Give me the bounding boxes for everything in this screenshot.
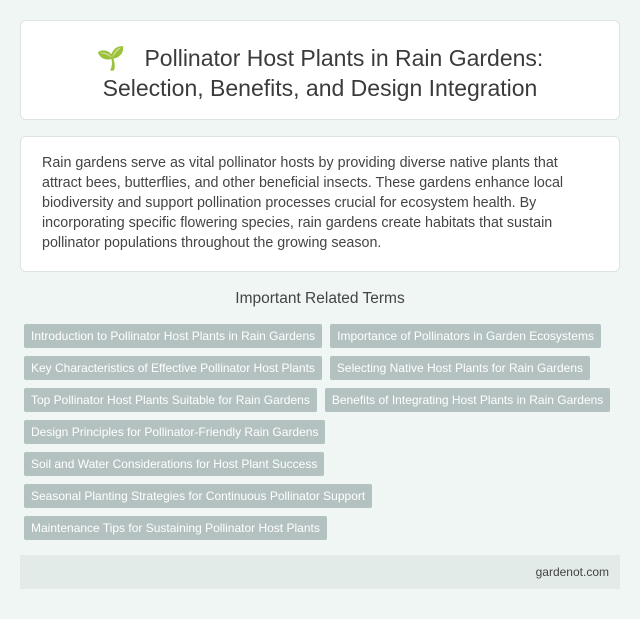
related terms tags: Design Principles for Pollinator-Friendly Rain Gardens	[31, 425, 318, 439]
related terms tags: Benefits of Integrating Host Plants in Rain Gardens	[332, 393, 603, 407]
related terms tags	[24, 324, 610, 540]
related terms tags: Introduction to Pollinator Host Plants in Rain Gardens	[31, 329, 315, 343]
related terms tags: Importance of Pollinators in Garden Ecosystems	[337, 329, 594, 343]
related terms tags: Maintenance Tips for Sustaining Pollinator Host Plants	[31, 521, 320, 535]
title: Selection, Benefits, and Design Integration	[103, 75, 537, 101]
related terms tags: Soil and Water Considerations for Host Plant Success	[31, 457, 317, 471]
title: 🌱 Pollinator Host Plants in Rain Gardens:	[97, 45, 543, 71]
description text: Rain gardens serve as vital pollinator hosts by providing diverse native plants that attract bees, butterflies, and other beneficial insects. These gardens enhance local biodiversity and support pollination processes crucial for ecosystem health. By incorporating specific flowering species, rain gardens create habitats that sustain pollinator populations throughout the growing season.	[42, 155, 563, 251]
footer: gardenot.com	[536, 565, 609, 579]
description card	[20, 136, 620, 272]
title	[97, 45, 543, 101]
related terms heading: Important Related Terms	[235, 290, 405, 307]
header card	[20, 20, 620, 120]
related terms tags: Key Characteristics of Effective Pollinator Host Plants	[31, 361, 315, 375]
footer	[20, 555, 620, 589]
related terms tags: Seasonal Planting Strategies for Continuous Pollinator Support	[31, 489, 365, 503]
related terms tags: Top Pollinator Host Plants Suitable for Rain Gardens	[31, 393, 310, 407]
related terms tags: Selecting Native Host Plants for Rain Gardens	[337, 361, 583, 375]
